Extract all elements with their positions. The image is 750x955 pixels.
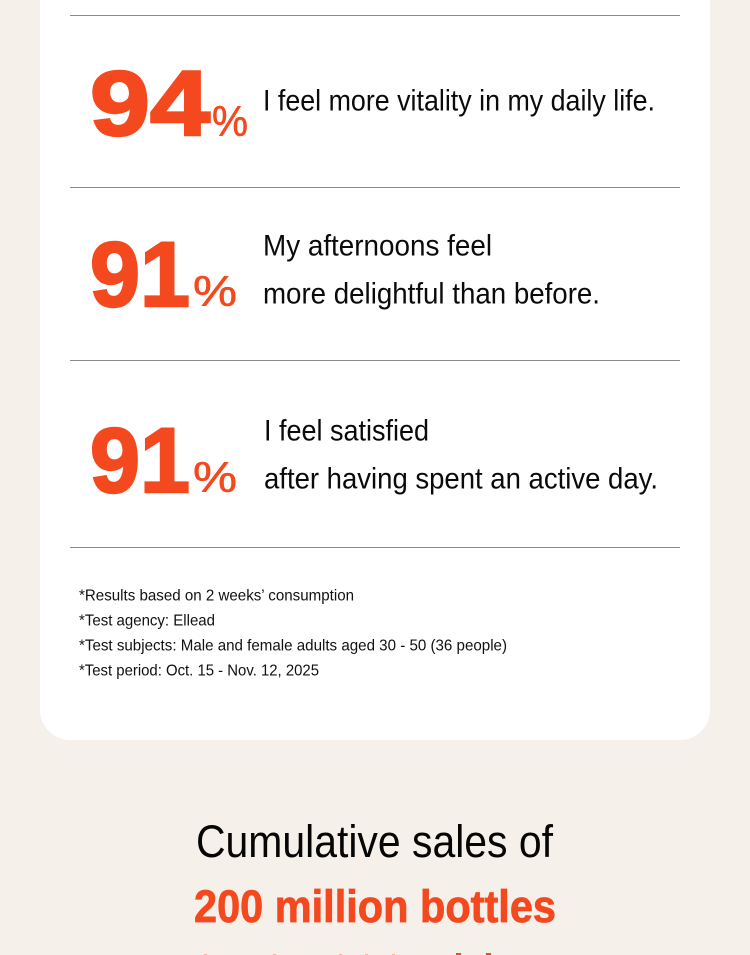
statement: satisfied — [264, 414, 658, 496]
stat number: 91%: 91 — [90, 410, 190, 512]
stat number: 91%: % — [193, 454, 237, 502]
statement: afternoons: more delightful than before. — [263, 278, 600, 310]
stat row: 91 percent satisfied — [90, 410, 658, 512]
footnotes — [79, 588, 507, 680]
footnotes: *Results based on 2 weeks’ consumption — [79, 588, 354, 604]
footnotes: *Test subjects: Male and female adults aged 30 - 50 (36 people) — [79, 638, 507, 654]
heading: cumulative sales: 200 million bottles — [194, 881, 556, 932]
statement: satisfied: I feel satisfied — [264, 414, 429, 448]
stat number: 91% — [90, 224, 237, 326]
stat row: 94 percent vitality — [90, 53, 655, 155]
stat number: 94%: % — [212, 98, 248, 146]
heading: cumulative sales — [194, 816, 556, 932]
stat number: 91%: 91 — [90, 224, 190, 326]
stat number: 94%: 94 — [90, 53, 210, 155]
footnotes: *Test period: Oct. 15 - Nov. 12, 2025 — [79, 662, 319, 680]
panel: survey results card — [40, 0, 710, 740]
statement: afternoons: My afternoons feel — [263, 230, 492, 262]
footnotes: *Test agency: Ellead — [79, 612, 215, 630]
statement: vitality: I feel more vitality in my daily life. — [263, 84, 655, 118]
cropped line of heading text at bottom edge — [204, 953, 491, 955]
statement: afternoons — [263, 230, 600, 310]
heading: cumulative sales: Cumulative sales of — [196, 816, 553, 867]
stat number: 94% — [90, 53, 248, 155]
stat row: 91 percent afternoons — [90, 224, 600, 326]
stat number: 91% — [90, 410, 237, 512]
statement: satisfied: after having spent an active day. — [264, 462, 658, 496]
stat number: 91%: % — [193, 268, 237, 316]
